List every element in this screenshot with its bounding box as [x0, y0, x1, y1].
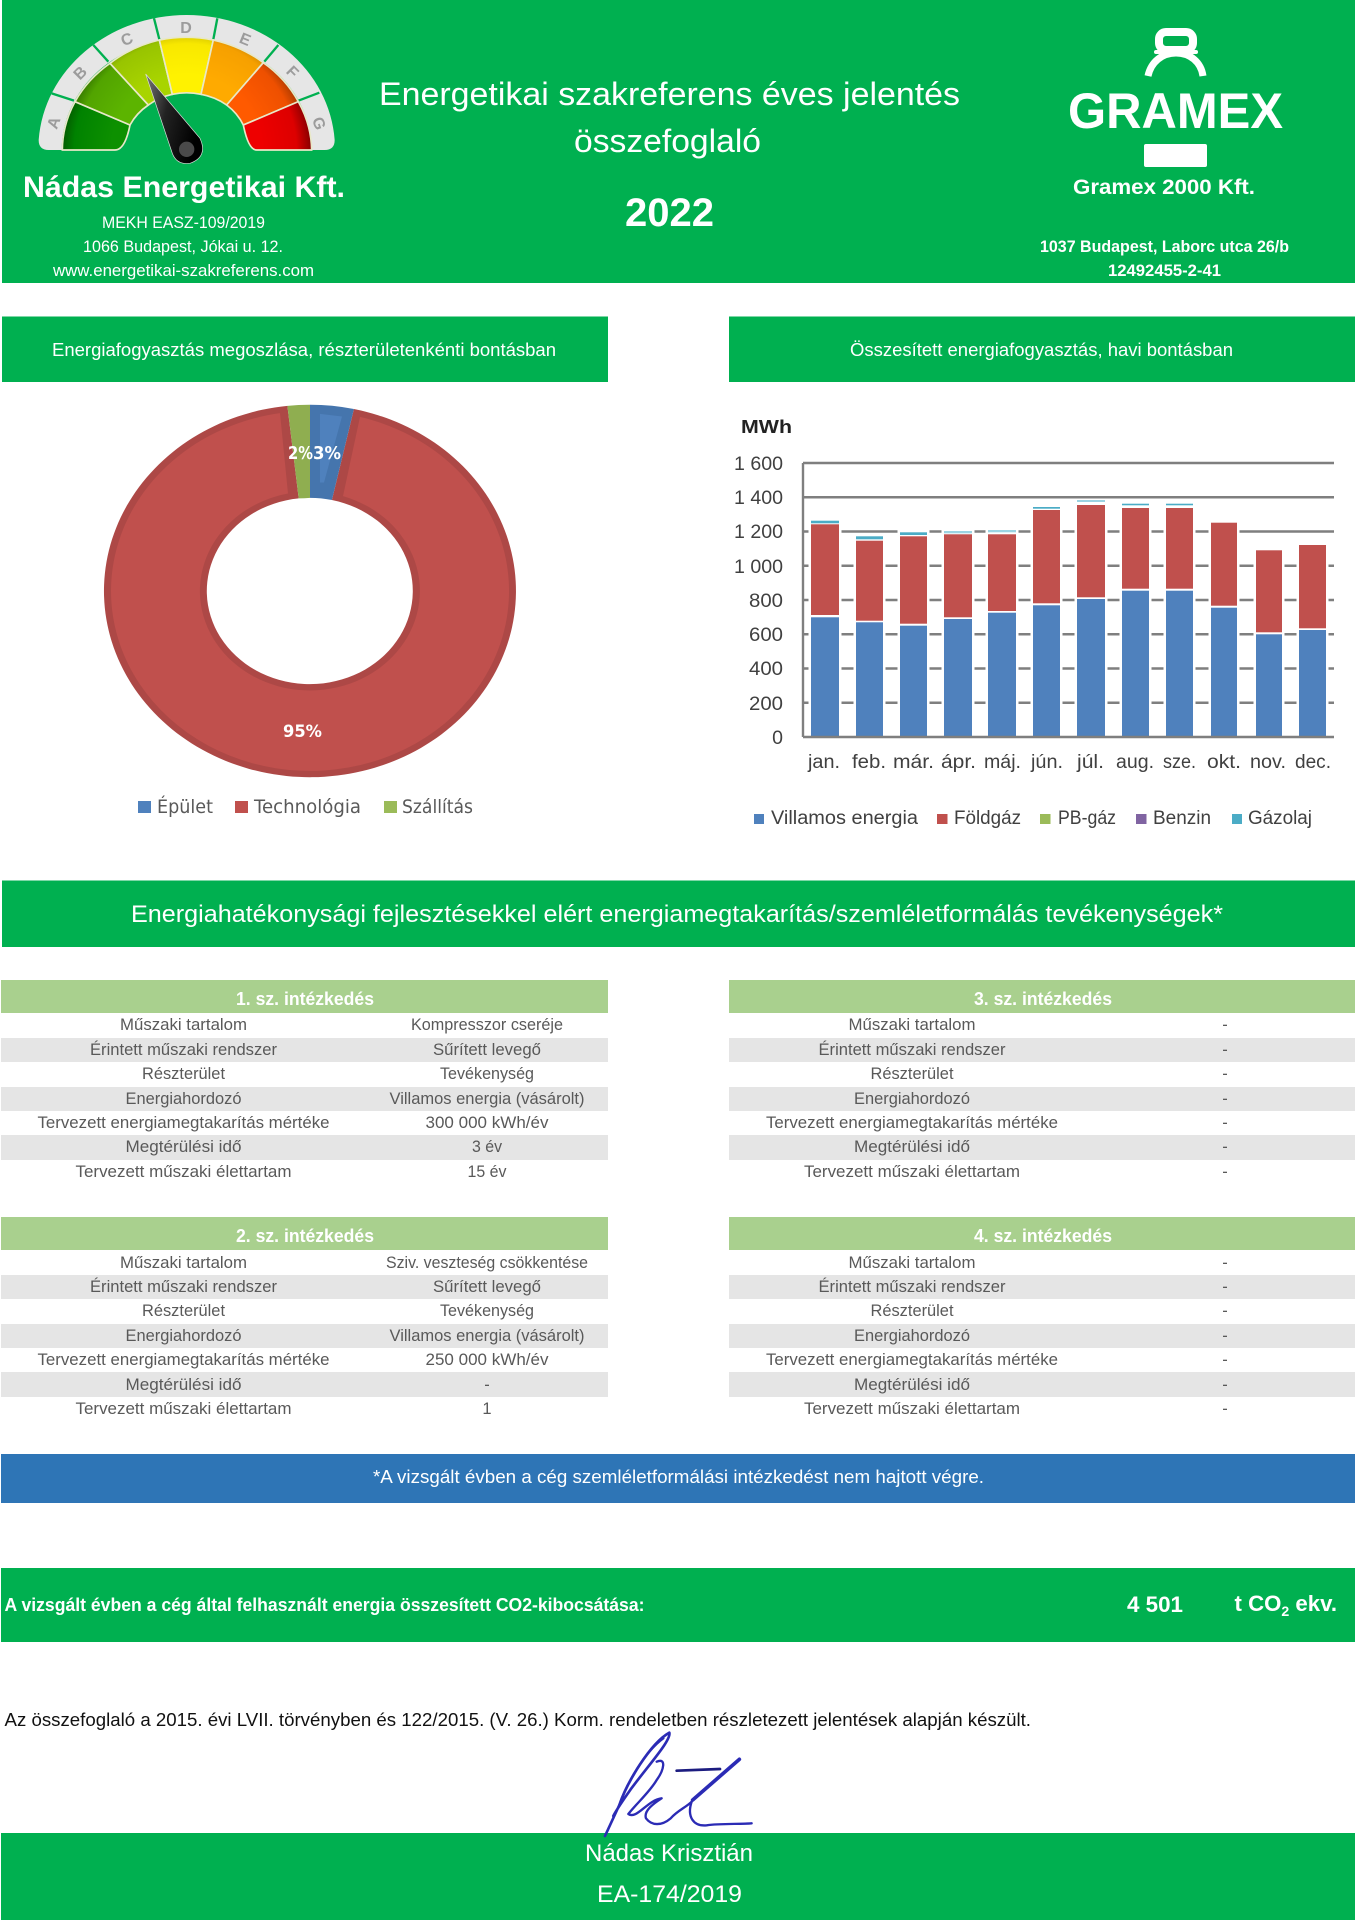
table: measure 3: Tervezett műszaki élettartam [804, 1163, 1020, 1181]
table: measure 1: Sűrített levegő [433, 1041, 541, 1059]
series: Gázolaj [811, 500, 1193, 539]
table: measure 4: Műszaki tartalom [848, 1254, 976, 1272]
CO2 emissions bar [1, 1568, 1355, 1642]
signatory name: Nádas Krisztián [585, 1840, 753, 1867]
table: measure 1: Kompresszor cseréje [411, 1016, 563, 1034]
table: measure 3: - [1222, 1041, 1228, 1059]
table: measure 2: Műszaki tartalom [120, 1254, 247, 1272]
donut chart [104, 405, 516, 818]
table: measure 3: Megtérülési idő [854, 1138, 970, 1156]
month labels: jan. [807, 752, 840, 773]
icon: energy rating gauge [39, 15, 335, 164]
table: measure 1: Részterület [142, 1065, 225, 1083]
table: measure 2: Érintett műszaki rendszer [90, 1277, 278, 1296]
icon: energy rating gauge: E [237, 30, 253, 50]
logo: Gramex: GRAMEX [1068, 83, 1283, 139]
table: measure 1: Megtérülési idő [126, 1138, 242, 1156]
heading: monthly chart [729, 316, 1355, 382]
table: measure 4: - [1222, 1351, 1228, 1369]
table: measure 3: 3. sz. intézkedés [974, 989, 1112, 1009]
chart legend: Gázolaj [1248, 808, 1312, 829]
icon: energy rating gauge: A [44, 114, 65, 131]
table: measure 3: - [1222, 1114, 1228, 1132]
table: measure 1: 3 év [472, 1138, 503, 1156]
footer band [1, 1833, 1355, 1920]
table: measure 1: Tervezett energiamegtakarítás mértéke [38, 1114, 330, 1132]
month labels: feb. [852, 752, 886, 773]
table: measure 3: Energiahordozó [854, 1090, 970, 1108]
y axis labels: 200 [749, 693, 783, 715]
logo: Gramex [1068, 32, 1283, 167]
table: measure 1: Energiahordozó [126, 1090, 242, 1108]
registration line: MEKH EASZ-109/2019 [102, 213, 265, 232]
heading: donut chart [2, 316, 608, 382]
table: measure 1: 1. sz. intézkedés [236, 989, 374, 1009]
table: measure 2: Megtérülési idő [126, 1376, 242, 1394]
CO2 unit: ekv. [1289, 1591, 1337, 1616]
table: measure 2: Tervezett műszaki élettartam [76, 1400, 292, 1418]
table: measure 2: Részterület [142, 1302, 225, 1320]
title line 2: összefoglaló [574, 123, 761, 159]
label 95%: 95% [283, 722, 322, 742]
icon: energy rating gauge: B [71, 63, 91, 84]
table: measure 1: Villamos energia (vásárolt) [390, 1090, 584, 1108]
y axis labels: 1 400 [734, 487, 783, 509]
table: measure 3: - [1222, 1065, 1228, 1083]
CO2 value: 4 501 [1127, 1592, 1183, 1617]
table: measure 2: Villamos energia (vásárolt) [390, 1327, 584, 1345]
series: Földgáz [811, 505, 1326, 632]
table: measure 4: Tervezett energiamegtakarítás mértéke [766, 1351, 1058, 1369]
table: measure 2: Energiahordozó [126, 1327, 242, 1345]
table: measure 3: - [1222, 1016, 1228, 1034]
y axis labels: 1 600 [734, 453, 783, 475]
table: measure 4: - [1222, 1254, 1228, 1272]
y axis labels: 0 [772, 727, 783, 749]
client name: Gramex 2000 Kft. [1073, 176, 1255, 199]
table: measure 1: Tervezett műszaki élettartam [76, 1163, 292, 1181]
table: measure 3: - [1222, 1163, 1228, 1181]
table: measure 2 [1, 1217, 608, 1418]
table: measure 4: - [1222, 1327, 1228, 1345]
section heading: efficiency measures: Energiahatékonysági fejlesztésekkel elért energiamegtakarítás/szemléletformálás tevékenységek* [131, 901, 1223, 928]
table: measure 3: - [1222, 1090, 1228, 1108]
label 2%: 2% [288, 443, 313, 464]
chart legend: Földgáz [954, 808, 1021, 829]
chart legend: Benzin [1153, 808, 1211, 829]
note bar: *A vizsgált évben a cég szemléletformálási intézkedést nem hajtott végre. [373, 1466, 984, 1487]
table: measure 3: Műszaki tartalom [848, 1016, 976, 1034]
y axis labels: 1 200 [734, 521, 783, 543]
donut legend [138, 795, 473, 818]
table: measure 4: Energiahordozó [854, 1327, 970, 1345]
donut legend: Technológia [253, 796, 361, 818]
table: measure 4: 4. sz. intézkedés [974, 1226, 1112, 1246]
month labels: máj. [984, 752, 1021, 773]
y axis labels: 800 [749, 590, 783, 612]
heading: donut chart: Energiafogyasztás megoszlása, részterületenkénti bontásban [52, 340, 556, 360]
client address: 1037 Budapest, Laborc utca 26/b [1040, 237, 1289, 256]
table: measure 4: Tervezett műszaki élettartam [804, 1400, 1020, 1418]
table: measure 2: 2. sz. intézkedés [236, 1226, 374, 1246]
table: measure 4: - [1222, 1400, 1228, 1418]
table: measure 4: - [1222, 1302, 1228, 1320]
header band [2, 0, 1355, 283]
donut legend: Épület [157, 795, 213, 818]
table: measure 4: - [1222, 1376, 1228, 1394]
series: Villamos energia [811, 591, 1326, 737]
y axis labels [734, 453, 783, 749]
CO2 statement: A vizsgált évben a cég által felhasznált energia összesített CO2-kibocsátása: [4, 1595, 644, 1615]
month labels: nov. [1250, 752, 1286, 773]
table: measure 3: Érintett műszaki rendszer [818, 1040, 1006, 1059]
y axis labels: 1 000 [734, 556, 783, 578]
month labels: sze. [1163, 752, 1196, 773]
x axis line [803, 736, 1334, 738]
table: measure 2: Tervezett energiamegtakarítás mértéke [38, 1351, 330, 1369]
icon: energy rating gauge: F [282, 63, 301, 82]
table: measure 2: - [484, 1376, 490, 1394]
table: measure 2: Sűrített levegő [433, 1278, 541, 1296]
company name: Nádas Energetikai: Nádas Energetikai Kft. [23, 171, 345, 204]
table: measure 4: Érintett műszaki rendszer [818, 1277, 1006, 1296]
month labels: már. [893, 752, 934, 773]
year: 2022 [625, 191, 714, 235]
month labels: dec. [1295, 752, 1331, 773]
chart legend [754, 808, 1312, 829]
table: measure 3: Tervezett energiamegtakarítás mértéke [766, 1114, 1058, 1132]
month labels: okt. [1207, 752, 1241, 773]
note bar [1, 1454, 1355, 1503]
y axis labels: 400 [749, 658, 783, 680]
y axis labels: 600 [749, 624, 783, 646]
table: measure 2: Tevékenység [440, 1302, 534, 1320]
table: measure 1: Műszaki tartalom [120, 1016, 247, 1034]
CO2 unit: 2 [1281, 1603, 1289, 1619]
table: measure 3: - [1222, 1138, 1228, 1156]
CO2 unit: t CO [1234, 1591, 1281, 1616]
table: measure 3: Részterület [870, 1065, 954, 1083]
table: measure 1 [1, 980, 608, 1181]
table: measure 1: 15 év [468, 1163, 507, 1181]
label 3%: 3% [313, 443, 341, 464]
table: measure 2: 250 000 kWh/év [426, 1351, 549, 1369]
chart legend: PB-gáz [1058, 808, 1116, 829]
table: measure 4: Részterület [870, 1302, 954, 1320]
address line: 1066 Budapest, Jókai u. 12. [83, 237, 283, 256]
website: www.energetikai-szakreferens.com [52, 261, 314, 280]
title line 1: Energetikai szakreferens éves jelentés [379, 76, 960, 112]
signatory number: EA-174/2019 [597, 1881, 742, 1908]
month labels: júl. [1076, 752, 1104, 773]
table: measure 1: 300 000 kWh/év [426, 1114, 549, 1132]
month labels [807, 752, 1331, 773]
table: measure 4: Megtérülési idő [854, 1376, 970, 1394]
table: measure 1: Tevékenység [440, 1065, 534, 1083]
signature [605, 1733, 752, 1836]
heading: monthly chart: Összesített energiafogyasztás, havi bontásban [850, 340, 1233, 360]
table: measure 2: 1 [482, 1400, 492, 1418]
table: measure 3 [729, 980, 1355, 1181]
month labels: jún. [1030, 752, 1063, 773]
unit label: MWh [741, 417, 792, 437]
section heading: efficiency measures [2, 880, 1355, 947]
client tax number: 12492455-2-41 [1108, 261, 1221, 280]
table: measure 4 [729, 1217, 1355, 1418]
chart legend: Villamos energia [771, 808, 918, 829]
month labels: aug. [1116, 752, 1154, 773]
icon: energy rating gauge: D [180, 20, 192, 37]
month labels: ápr. [941, 752, 976, 773]
table: measure 1: Érintett műszaki rendszer [90, 1040, 278, 1059]
y axis and grid [803, 463, 1334, 737]
icon: energy rating gauge: C [119, 30, 136, 50]
donut legend: Szállítás [402, 796, 473, 818]
table: measure 2: Sziv. veszteség csökkentése [386, 1254, 588, 1272]
bar halos [808, 499, 1328, 737]
table: measure 4: - [1222, 1278, 1228, 1296]
legal note: Az összefoglaló a 2015. évi LVII. törvényben és 122/2015. (V. 26.) Korm. rendeletben részletezett jelentések alapján készült. [4, 1710, 1031, 1730]
stacked bar chart: monthly energy [734, 417, 1334, 829]
icon: energy rating gauge: G [308, 115, 328, 132]
